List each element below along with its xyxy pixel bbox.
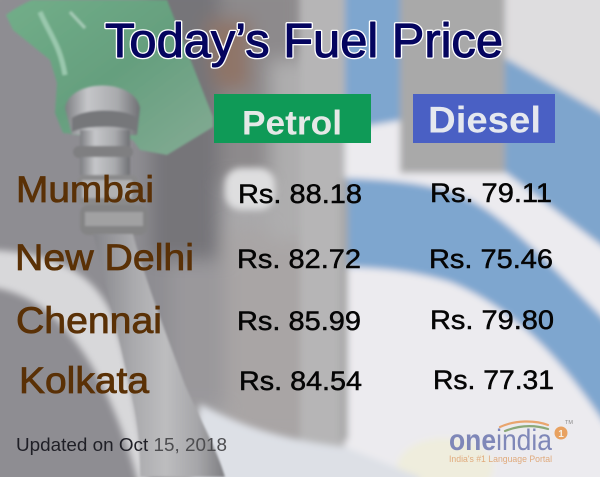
logo badge: 1 <box>558 429 564 440</box>
diesel header <box>413 94 555 143</box>
diesel prices: Rs. 79.11 <box>430 178 552 208</box>
petrol prices: Rs. 82.72 <box>237 244 361 274</box>
title: Today’s Fuel Price <box>105 15 503 68</box>
city labels: Mumbai <box>16 169 154 210</box>
logo wordmark: oneindia <box>449 424 552 457</box>
diesel header: Diesel <box>428 100 541 140</box>
logo arcs <box>500 421 548 431</box>
oneindia logo <box>449 420 573 465</box>
city labels: Chennai <box>16 300 162 341</box>
trademark: TM <box>565 420 573 426</box>
diesel prices: Rs. 77.31 <box>433 365 554 395</box>
green handle <box>6 0 213 155</box>
title: Today’s Fuel Price <box>105 15 503 68</box>
metal nozzle neck and collars <box>65 86 148 235</box>
diesel prices: Rs. 75.46 <box>429 244 553 274</box>
blurred forecourt shapes <box>0 0 350 477</box>
white curved band <box>0 250 150 477</box>
metal spout <box>93 234 225 477</box>
city labels <box>15 169 194 401</box>
petrol prices <box>237 179 362 396</box>
logo tagline: India's #1 Language Portal <box>449 454 552 465</box>
petrol header: Petrol <box>242 104 342 142</box>
petrol prices: Rs. 84.54 <box>239 366 362 396</box>
petrol prices: Rs. 88.18 <box>238 179 362 209</box>
city labels: Kolkata <box>19 360 149 401</box>
petrol header <box>214 94 371 143</box>
city labels: New Delhi <box>15 237 194 278</box>
diesel prices <box>429 178 554 395</box>
update date note: Updated on Oct 15, 2018 <box>16 435 227 455</box>
diesel prices: Rs. 79.80 <box>430 305 554 335</box>
petrol prices: Rs. 85.99 <box>237 306 361 336</box>
